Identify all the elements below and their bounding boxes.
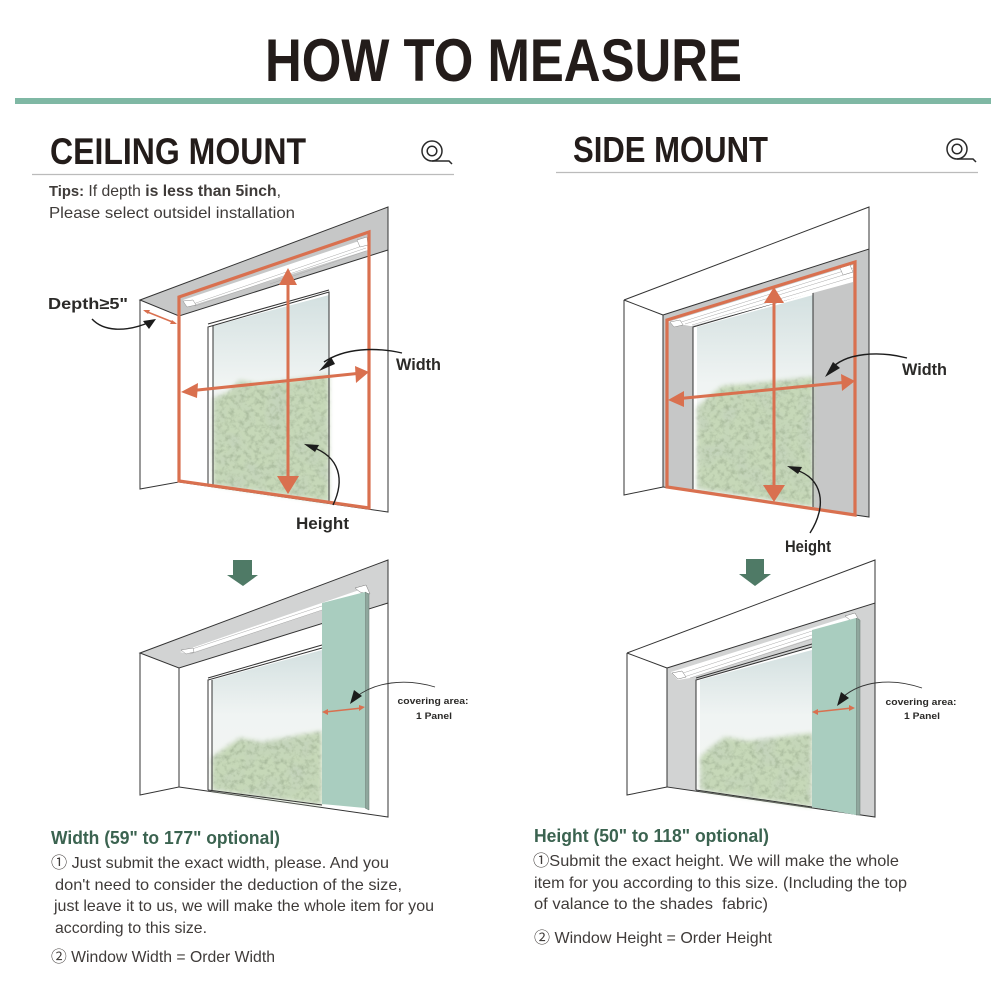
- width callout: [825, 354, 947, 379]
- height range heading: Height (50" to 118" optional): [534, 826, 769, 846]
- side mount instructions: of valance to the shades fabric): [534, 896, 768, 913]
- wall outline: [624, 207, 869, 495]
- grey reveal: [663, 249, 869, 517]
- depth label: Depth≥5": [48, 296, 128, 313]
- height callout: Height: [296, 514, 349, 533]
- covering area callout: [350, 682, 468, 721]
- height callout: [296, 444, 349, 533]
- side mount instructions: [533, 826, 907, 947]
- window: [208, 290, 329, 502]
- covering area callout: covering area:: [886, 697, 956, 707]
- panel: side mount heading: [556, 129, 978, 172]
- height arrow: [763, 287, 785, 502]
- covering area callout: 1 Panel: [904, 711, 940, 721]
- width callout: Width: [902, 360, 947, 379]
- panel: ceiling mount measuring diagram: [48, 207, 441, 533]
- ceiling soffit: [140, 560, 388, 668]
- title: HOW TO MEASURE: [265, 27, 742, 94]
- ceiling mount instructions: ② Window Width = Order Width: [51, 948, 275, 966]
- headrail: [671, 613, 860, 680]
- side mount instructions: item for you according to this size. (Including the top: [534, 875, 907, 892]
- heading: ceiling mount: CEILING MOUNT: [50, 131, 306, 172]
- height callout: Height: [785, 537, 831, 556]
- tips text: [49, 183, 295, 222]
- heading: side mount: SIDE MOUNT: [573, 129, 768, 170]
- green shade panel: [322, 592, 369, 810]
- title rule: [15, 98, 991, 104]
- wall outline: [140, 603, 388, 817]
- icon: tape measure: [947, 139, 976, 162]
- ceiling mount instructions: just leave it to us, we will make the whole item for you: [53, 898, 434, 915]
- window: [696, 644, 812, 807]
- wall outline: [627, 560, 875, 795]
- width arrow: [668, 374, 855, 407]
- ceiling mount instructions: [51, 828, 434, 966]
- panel width arrow: [812, 705, 855, 715]
- covering area callout: covering area:: [398, 696, 468, 706]
- orange measuring frame: [667, 262, 855, 515]
- orange measuring frame: [179, 232, 369, 508]
- side mount instructions: ② Window Height = Order Height: [534, 929, 773, 947]
- ceiling mount instructions: ① Just submit the exact width, please. And you: [51, 854, 389, 872]
- ceiling mount instructions: don't need to consider the deduction of the size,: [55, 877, 402, 894]
- height arrow: [277, 268, 299, 494]
- window: [693, 290, 813, 507]
- tips text: Tips: If depth is less than 5inch,: [49, 183, 281, 200]
- tips text: Please select outsidel installation: [49, 205, 295, 222]
- covering area callout: 1 Panel: [416, 711, 452, 721]
- width callout: Width: [396, 355, 441, 374]
- grey reveal: [667, 603, 875, 817]
- ceiling soffit: [140, 207, 388, 316]
- panel: ceiling mount result diagram: [140, 560, 468, 817]
- blind headrail: [183, 237, 368, 307]
- arrow: side mount down: [739, 559, 771, 586]
- ceiling mount instructions: according to this size.: [55, 920, 207, 937]
- side mount instructions: ①Submit the exact height. We will make the whole: [533, 852, 899, 870]
- green shade panel: [812, 618, 860, 815]
- covering area callout: [837, 682, 956, 721]
- height callout: [785, 466, 831, 556]
- window: [208, 645, 322, 805]
- width arrow: [181, 366, 369, 398]
- panel width arrow: [322, 705, 365, 715]
- depth callout arrow: [92, 319, 156, 329]
- panel: ceiling mount heading: [32, 131, 454, 174]
- blind headrail: [668, 265, 853, 327]
- arrow: ceiling mount down: [227, 560, 258, 586]
- panel: side mount result diagram: [627, 560, 956, 817]
- panel: side mount measuring diagram: [624, 207, 947, 556]
- width callout: [319, 350, 441, 374]
- icon: tape measure: [422, 141, 452, 164]
- wall outline: [140, 250, 388, 512]
- depth arrow: [143, 310, 177, 324]
- headrail: [180, 585, 370, 654]
- width range heading: Width (59" to 177" optional): [51, 828, 280, 848]
